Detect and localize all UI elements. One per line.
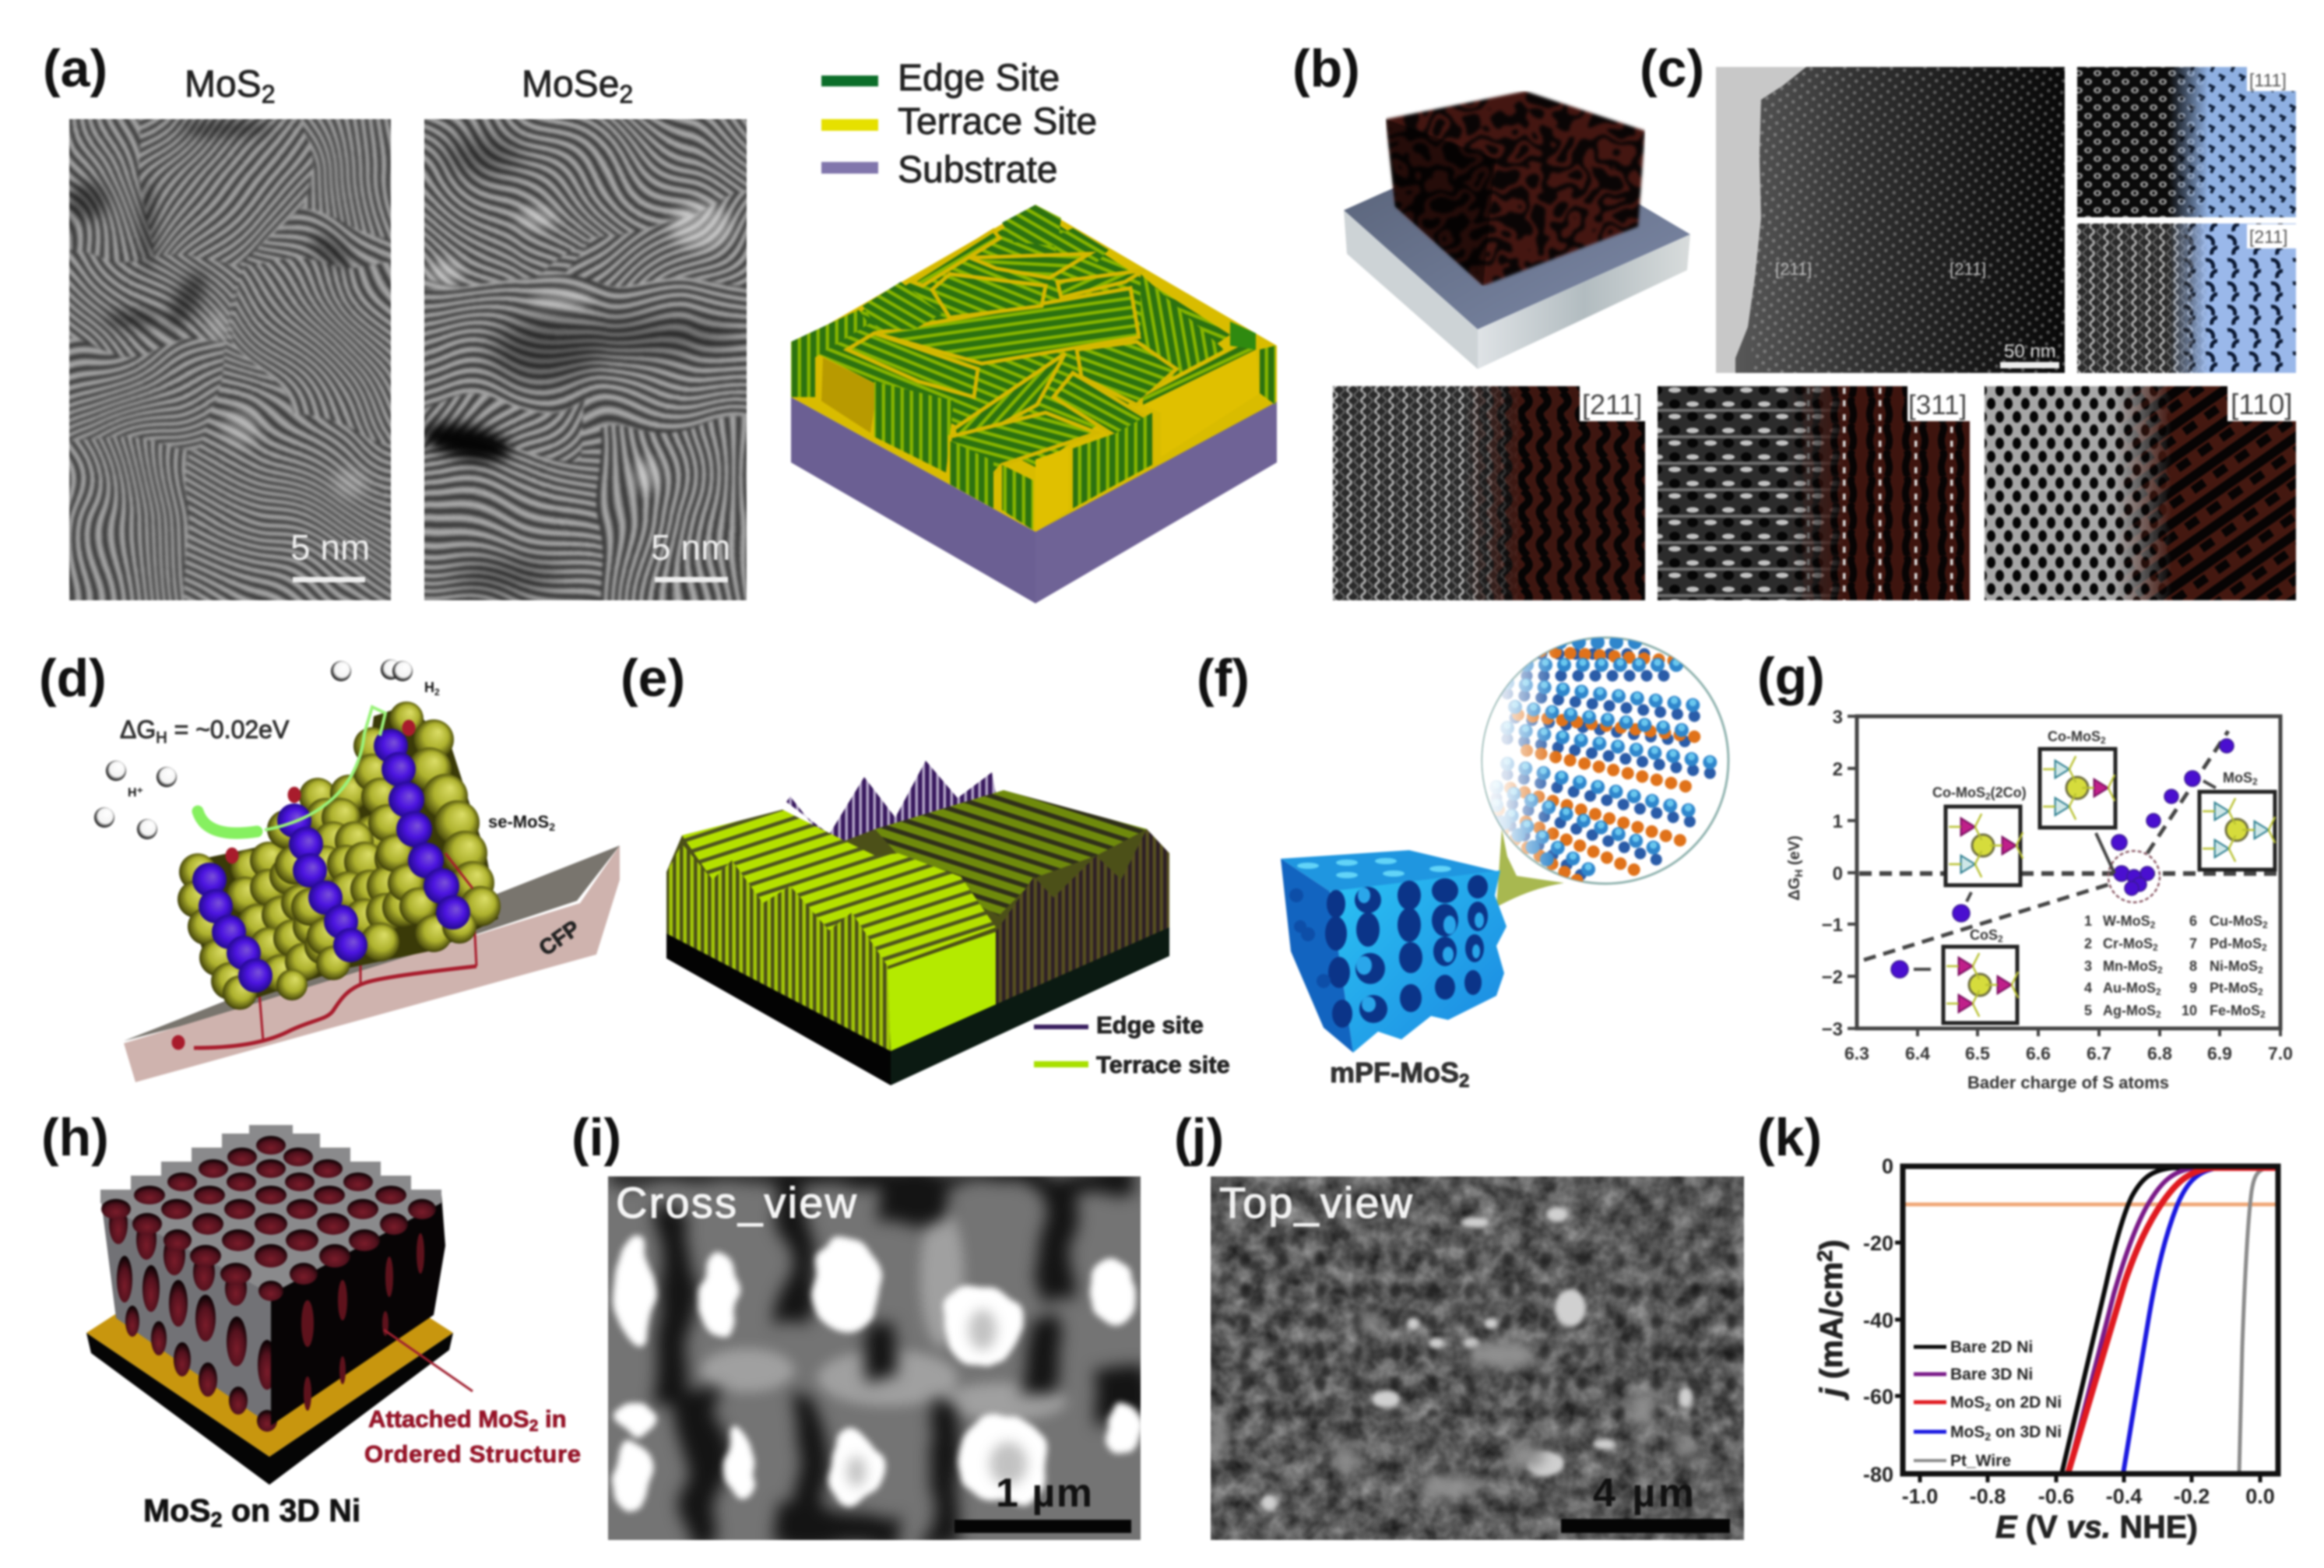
legend: on 3D Ni	[1991, 1423, 2062, 1441]
SEM top view image	[1211, 1176, 1744, 1540]
x tick labels: -0.8	[1970, 1485, 2006, 1508]
data points	[1891, 739, 2234, 978]
legend	[1034, 1011, 1230, 1078]
x tick labels: -0.6	[2038, 1485, 2074, 1508]
hydrogen spheres	[94, 659, 413, 839]
inset captions: 2	[2252, 776, 2258, 787]
legend: site types: Terrace Site	[898, 101, 1097, 142]
dopant legend: 8	[2189, 958, 2197, 974]
dopant legend: 3	[2084, 958, 2092, 974]
H+ label: H⁺	[128, 786, 143, 800]
legend: Bare 3D Ni	[1950, 1366, 2033, 1383]
x tick labels	[1902, 1485, 2275, 1508]
y tick labels	[1822, 707, 1843, 1040]
x tick labels: 6.4	[1905, 1043, 1930, 1063]
y tick labels: 0	[1833, 863, 1843, 884]
se-MoS2 label: 2	[549, 821, 555, 833]
y tick labels: 3	[1833, 707, 1843, 728]
dopant legend: 2	[2258, 965, 2263, 976]
legend	[1914, 1338, 2062, 1470]
y tick labels: −1	[1822, 915, 1843, 936]
dopant legend: 2	[2156, 1009, 2161, 1020]
y axis title: j (mA/cm	[1813, 1262, 1849, 1397]
red annotation	[364, 1405, 581, 1468]
dashed trend lines	[1859, 731, 2278, 960]
TEM image MoSe2	[423, 118, 748, 602]
panel: (j) top view SEM	[1174, 1108, 1744, 1540]
electron path	[194, 853, 476, 1048]
legend: site types: Edge Site	[898, 58, 1060, 99]
dopant legend: Fe-MoS	[2210, 1003, 2260, 1018]
panel: (b) gyroid on substrate	[1292, 39, 1690, 369]
y axis title: ΔG	[1786, 877, 1803, 901]
inset Co-MoS2	[2040, 749, 2115, 828]
y tick labels: -60	[1863, 1385, 1893, 1408]
legend: MoS	[1950, 1423, 1985, 1441]
dopant legend: W-MoS	[2103, 913, 2150, 929]
legend: Terrace site	[1096, 1051, 1230, 1078]
y axis title: )	[1813, 1239, 1849, 1250]
inset [211]	[2077, 223, 2296, 373]
x tick labels: 6.7	[2087, 1043, 2111, 1063]
scale bar 1 µm: 1 µm	[996, 1471, 1092, 1516]
view title: Top_view	[1219, 1178, 1413, 1227]
lime top surface	[682, 810, 996, 966]
panel: (i) cross view SEM	[571, 1108, 1148, 1549]
inset captions: 2	[1998, 933, 2003, 944]
inset captions: 2	[2101, 735, 2106, 746]
view title: Cross_view	[616, 1178, 857, 1227]
red annotation: Ordered Structure	[364, 1440, 581, 1468]
SEM cross section image	[608, 1168, 1148, 1549]
dopant legend: 6	[2189, 913, 2197, 929]
scale bar 5 nm MoS2: 5 nm	[290, 527, 370, 568]
dopant legend: 2	[2262, 919, 2268, 930]
porous blue cube	[1281, 850, 1507, 1053]
dopant legend: 2	[2258, 986, 2263, 997]
dopant legend: 4	[2084, 980, 2092, 996]
striped left face	[666, 844, 891, 1051]
dopant legend: 2	[2150, 919, 2156, 930]
tile [110]	[1985, 386, 2296, 600]
3D model with edge and terrace sites	[791, 205, 1277, 603]
y tick labels	[1863, 1155, 1893, 1486]
label (c): (c)	[1640, 39, 1704, 98]
gyroid cube	[1386, 91, 1645, 286]
y tick labels: −3	[1822, 1019, 1843, 1040]
label (g): (g)	[1757, 647, 1825, 706]
main TEM image: [211]	[1775, 259, 1812, 279]
inset [111]: [111]	[2249, 70, 2287, 90]
y tick labels: 0	[1882, 1155, 1893, 1178]
CFP plate	[124, 846, 620, 1082]
x tick labels: -1.0	[1902, 1485, 1938, 1508]
panel: (c) TEM lattice views	[1333, 39, 2296, 600]
tile [110]: [110]	[2231, 388, 2293, 420]
dopant legend: 10	[2182, 1003, 2197, 1018]
panel: (h) MoS2 on 3D Ni	[41, 1108, 581, 1531]
substrate block	[1344, 132, 1690, 369]
tile [211]: [211]	[1582, 388, 1642, 420]
main TEM image: [211]	[1950, 259, 1986, 279]
y tick labels: −2	[1822, 967, 1843, 988]
y axis title: H	[1792, 870, 1805, 877]
y tick labels: 2	[1833, 759, 1843, 780]
panel: (f) mPF-MoS2	[1197, 638, 1728, 1092]
scale bar 1 µm	[955, 1471, 1131, 1533]
inset [111]	[2077, 67, 2296, 217]
heading MoSe2: MoSe	[522, 64, 619, 105]
x tick labels: -0.2	[2174, 1485, 2210, 1508]
red active sites	[173, 721, 473, 1049]
porous 3D Ni right face	[271, 1194, 445, 1426]
label (i): (i)	[571, 1108, 621, 1167]
y tick labels: -20	[1863, 1232, 1893, 1255]
se-MoS2 label: se-MoS	[488, 812, 549, 831]
inset [211]: [211]	[2249, 227, 2287, 247]
dopant legend: 7	[2189, 936, 2197, 951]
x axis title: E (V vs. NHE)	[1995, 1509, 2198, 1545]
x tick labels: 6.6	[2026, 1043, 2051, 1063]
heading MoSe2: 2	[619, 80, 633, 108]
heading MoS2: 2	[262, 80, 276, 108]
main TEM image	[1716, 67, 2065, 373]
dopant legend: 9	[2189, 980, 2197, 996]
dopant legend: Ni-MoS	[2210, 958, 2258, 974]
label (h): (h)	[41, 1108, 109, 1167]
caption: 2	[211, 1508, 223, 1531]
porous 3D Ni top face	[100, 1125, 441, 1301]
red arrow to attached MoS2	[384, 1330, 473, 1391]
dopant legend: Mn-MoS	[2103, 958, 2157, 974]
tile [311]	[1658, 386, 1970, 600]
backing body	[666, 790, 1169, 1051]
caption: MoS	[143, 1492, 211, 1528]
legend: on 2D Ni	[1991, 1394, 2062, 1412]
reference line at -10 mA/cm2	[1903, 1202, 2278, 1207]
H2 label: 2	[434, 687, 440, 698]
dopant legend: Pd-MoS	[2210, 936, 2262, 951]
dopant legend: 2	[2262, 942, 2267, 953]
curves	[2062, 1168, 2278, 1474]
free energy annotation: ΔG	[120, 715, 156, 744]
dopant legend: 5	[2084, 1003, 2092, 1018]
dopant legend: 2	[2153, 942, 2158, 953]
label (f): (f)	[1197, 649, 1250, 708]
x tick labels: 6.9	[2207, 1043, 2232, 1063]
label (e): (e)	[621, 649, 685, 708]
legend: Edge site	[1096, 1011, 1204, 1039]
dopant legend: Cu-MoS	[2210, 913, 2262, 929]
inset captions: CoS	[1970, 927, 1998, 943]
dashed circle around cluster	[2108, 851, 2160, 902]
legend: Pt_Wire	[1950, 1452, 2011, 1470]
panel: (d) se-MoS2 on CFP	[39, 649, 620, 1082]
porous 3D Ni left face	[100, 1194, 277, 1432]
x tick labels: 7.0	[2268, 1043, 2293, 1063]
x tick labels: 6.8	[2147, 1043, 2172, 1063]
plot axes and ticks	[1848, 716, 2280, 1036]
x tick labels: 0.0	[2245, 1485, 2275, 1508]
red annotation: 2	[529, 1417, 538, 1435]
red annotation: Attached MoS	[368, 1405, 529, 1433]
label (j): (j)	[1174, 1108, 1224, 1167]
scale bar 4 µm: 4 µm	[1593, 1471, 1694, 1516]
connector to magnifier	[1496, 829, 1564, 907]
label (b): (b)	[1292, 39, 1360, 98]
inset captions: (2Co)	[1991, 785, 2027, 800]
x tick labels: -0.4	[2106, 1485, 2142, 1508]
inset Co-MoS2(2Co)	[1946, 807, 2023, 885]
green reaction arrow	[198, 811, 257, 833]
x tick labels	[1844, 1043, 2293, 1063]
dopant legend: 2	[2156, 986, 2161, 997]
label (d): (d)	[39, 649, 107, 708]
TEM image MoS2	[68, 118, 392, 602]
dopant legend: 2	[2084, 936, 2092, 951]
tile [211]	[1333, 386, 1645, 600]
y tick labels: 1	[1833, 811, 1843, 832]
inset MoS2	[2199, 792, 2275, 870]
free energy annotation: H	[156, 730, 167, 747]
x tick labels: 6.3	[1844, 1043, 1869, 1063]
legend: 2	[1985, 1401, 1991, 1413]
H2 label: H	[424, 680, 434, 695]
y tick labels: -80	[1863, 1463, 1893, 1486]
main TEM image: 50 nm	[2004, 341, 2056, 362]
inset captions: MoS	[2223, 770, 2252, 786]
CFP label: CFP	[535, 916, 584, 961]
x tick labels: 6.5	[1965, 1043, 1990, 1063]
dopant legend: Pt-MoS	[2210, 980, 2258, 996]
molecular sheets of MoS2	[178, 701, 501, 1010]
leader lines	[1914, 781, 2216, 969]
panel: (e) edge and terrace model	[621, 649, 1230, 1085]
mPF-MoS2 caption: mPF-MoS	[1330, 1056, 1459, 1088]
label (a): (a)	[43, 39, 107, 98]
panel: (a) layered TEM and site model	[16, 39, 1277, 638]
dopant legend: 2	[2157, 965, 2163, 976]
free energy annotation: = ~0.02eV	[167, 715, 290, 744]
inset CoS2	[1943, 947, 2018, 1023]
legend: 2	[1985, 1430, 1991, 1443]
olive top surface	[875, 790, 1147, 916]
purple edge spikes	[786, 761, 999, 860]
dopant legend	[2084, 913, 2268, 1020]
panel: (g) Bader charge scatter plot	[1757, 647, 2293, 1092]
lime terrace panel	[888, 932, 996, 1051]
red annotation: in	[538, 1405, 567, 1433]
x axis title: Bader charge of S atoms	[1967, 1073, 2169, 1092]
inset captions: 2	[1985, 791, 1991, 802]
dopant legend: Cr-MoS	[2103, 936, 2153, 951]
dopant legend: 2	[2260, 1009, 2266, 1020]
scale bar 4 µm	[1561, 1471, 1730, 1533]
dopant legend: 1	[2084, 913, 2092, 929]
tile [311]: [311]	[1908, 390, 1967, 420]
mPF-MoS2 caption: 2	[1459, 1071, 1469, 1092]
legend: MoS	[1950, 1394, 1985, 1412]
legend: site types	[821, 58, 1097, 191]
inset captions: Co-MoS	[1932, 785, 1985, 800]
y tick labels: -40	[1863, 1309, 1893, 1332]
base substrate	[86, 1215, 453, 1485]
dopant legend: Ag-MoS	[2103, 1003, 2156, 1018]
inset captions: Co-MoS	[2048, 729, 2101, 744]
legend: site types: Substrate	[898, 149, 1057, 191]
scale bar 5 nm MoSe2: 5 nm	[651, 527, 730, 568]
black base	[666, 927, 1169, 1085]
y axis title: 2	[1813, 1250, 1837, 1262]
y axis title: (eV)	[1786, 835, 1803, 870]
panel: (k) polarisation curves	[1757, 1108, 2278, 1545]
dopant legend: Au-MoS	[2103, 980, 2156, 996]
caption: on 3D Ni	[223, 1492, 360, 1528]
heading MoS2: MoS	[185, 64, 262, 105]
striped right face	[996, 829, 1169, 1008]
inset captions	[1932, 729, 2258, 944]
magnified crystal lattice	[1482, 638, 1728, 888]
label (k): (k)	[1757, 1108, 1822, 1167]
axes frame and ticks	[1895, 1166, 2278, 1482]
legend: Bare 2D Ni	[1950, 1338, 2033, 1356]
